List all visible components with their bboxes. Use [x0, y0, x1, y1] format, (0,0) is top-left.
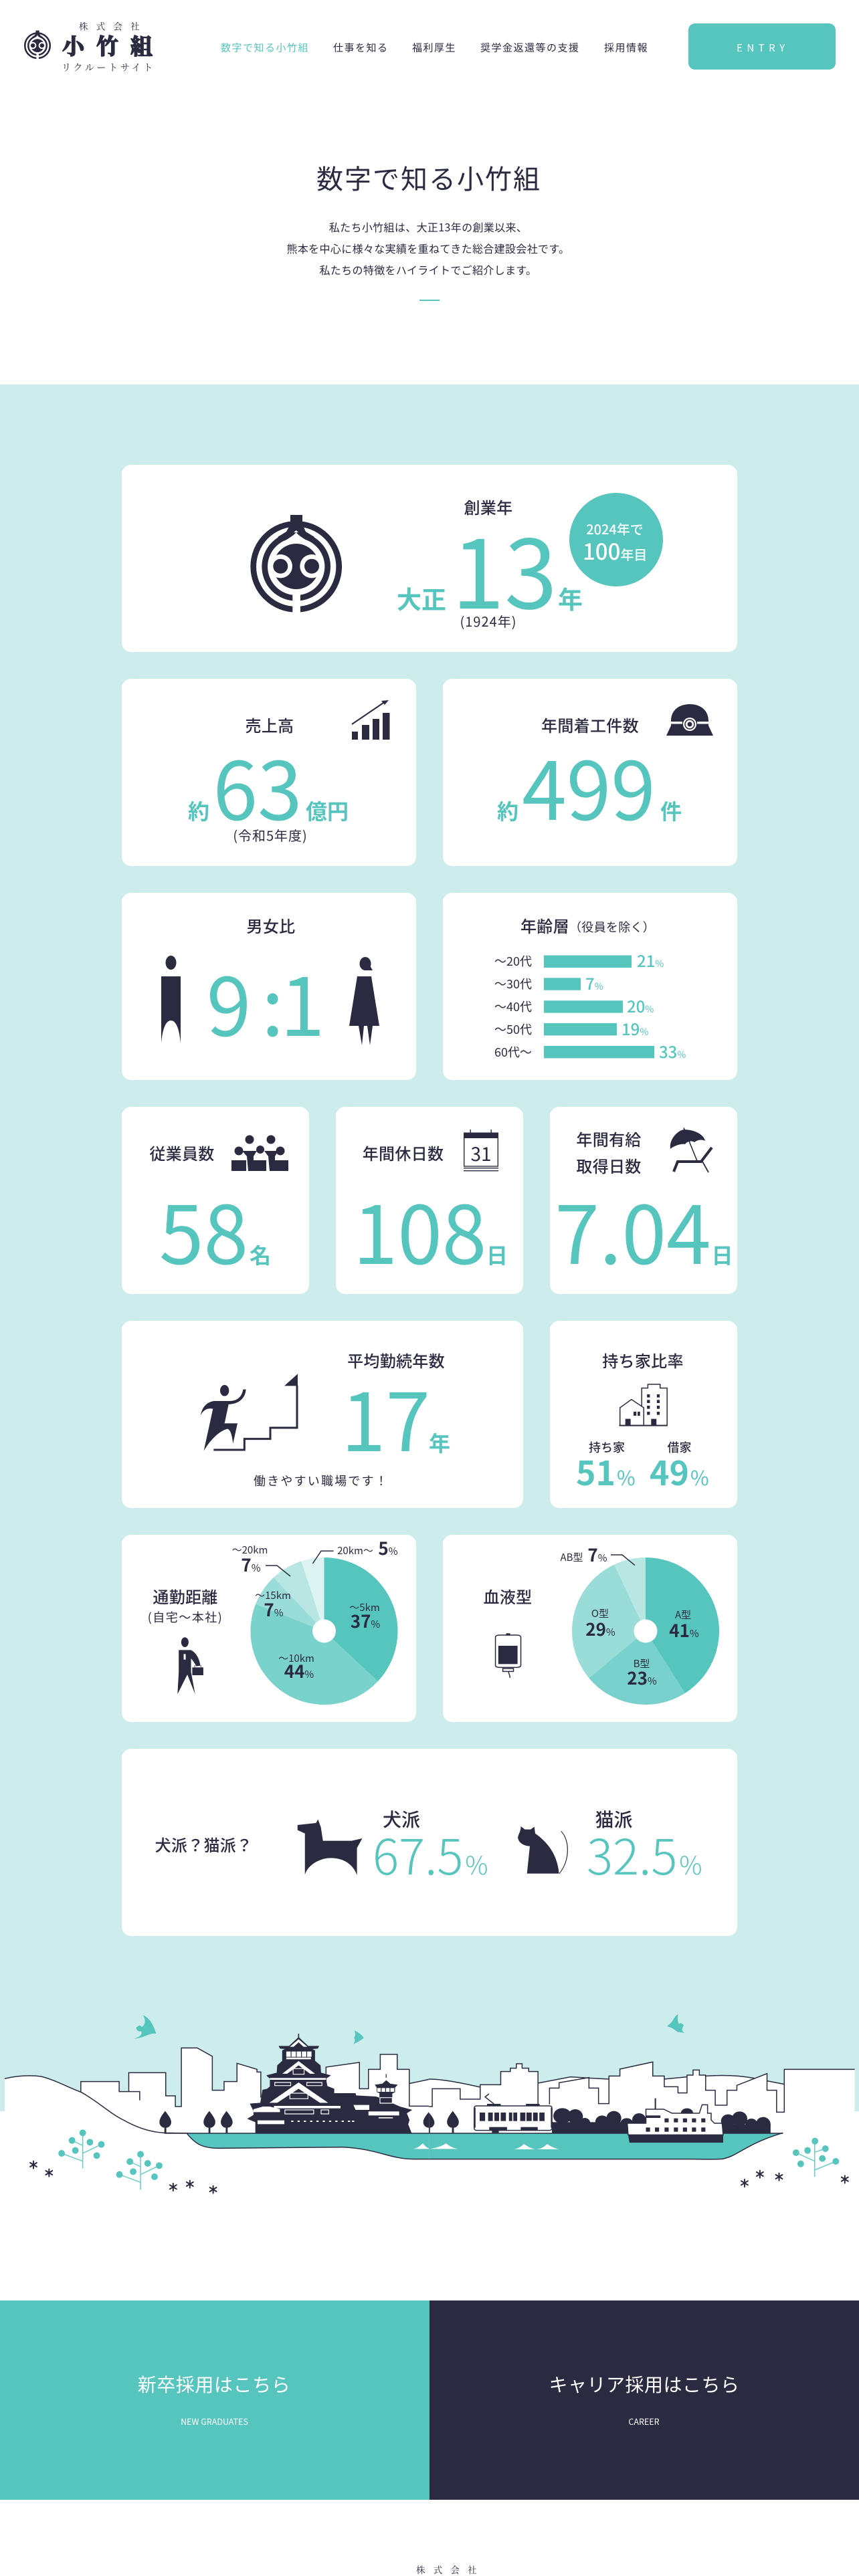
ratio value: 9 [207, 943, 251, 1059]
river [187, 2133, 430, 2159]
project value: 499 [522, 727, 656, 843]
pie labels: 7% [264, 1597, 284, 1622]
panel: annual holidays [336, 1107, 523, 1294]
panel: age distribution [443, 893, 737, 1080]
intro text: 私たち小竹組は、大正13年の創業以来、 [329, 219, 527, 235]
panel: gender ratio [122, 893, 416, 1080]
asterisk plants [741, 2171, 848, 2187]
navigation [221, 40, 648, 55]
illustration: Kumamoto cityscape [4, 2014, 855, 2194]
icon: blood bag [496, 1633, 521, 1678]
icon: company emblem [254, 515, 339, 614]
bar chart: 19% [622, 1016, 648, 1040]
heading: (自宅～本社) [148, 1608, 223, 1626]
heading [576, 1127, 642, 1177]
intro text: 私たちの特徴をハイライトでご紹介します。 [319, 261, 537, 278]
heading: 売上高 [246, 713, 294, 736]
bar chart: 33% [659, 1039, 686, 1063]
sales value: 63 [213, 727, 302, 843]
logo [25, 19, 165, 74]
ratio value: 1 [280, 943, 324, 1059]
tram [474, 2094, 552, 2133]
icon: woman [349, 957, 379, 1045]
bar chart: 21% [637, 948, 664, 972]
pie labels: 29% [585, 1616, 615, 1641]
heading: 平均勤続年数 [347, 1348, 445, 1372]
pie labels [561, 1542, 699, 1690]
pie labels: A型 [675, 1608, 691, 1622]
heading: 年間休日数 [363, 1141, 444, 1164]
navigation: 奨学金返還等の支援 [480, 40, 580, 55]
heading: 血液型 [484, 1584, 532, 1608]
heading: 持ち家比率 [602, 1348, 684, 1372]
founding value: 大正 [397, 580, 446, 616]
heading: 従業員数 [149, 1141, 215, 1164]
pie labels: 7% [587, 1542, 607, 1567]
employee value: 58 [159, 1171, 248, 1287]
logo emblem [25, 31, 50, 60]
founding value: 年 [558, 580, 583, 616]
waves [429, 2143, 560, 2149]
castle [247, 2034, 412, 2133]
bar chart: 7% [585, 971, 603, 994]
icon: calendar: 31 [470, 1140, 492, 1167]
employee value: 名 [250, 1239, 271, 1270]
pie labels: ～15km [255, 1588, 291, 1602]
entry button: ENTRY [737, 41, 789, 55]
heading: 年間有給 [576, 1127, 642, 1150]
panel: annual projects [443, 679, 737, 866]
logo: 小竹組 [62, 29, 165, 61]
accent dash [419, 300, 440, 301]
icon: man [161, 956, 181, 1043]
bar chart: ～20代 [494, 952, 532, 970]
navigation: 福利厚生 [412, 40, 456, 55]
rented share: 借家 [668, 1438, 692, 1456]
pie labels: 7% [241, 1552, 261, 1577]
logo: 株式会社 [79, 19, 148, 32]
project value: 件 [660, 795, 682, 826]
badge: 2024年で [586, 519, 644, 538]
river [429, 2133, 783, 2159]
sales value: 億円 [306, 795, 349, 826]
cat share: 猫派 [595, 1806, 633, 1832]
owned share: 51% [576, 1447, 636, 1495]
skyline outline [429, 2062, 855, 2112]
dog share: 67.5% [373, 1818, 488, 1889]
heading: 取得日数 [576, 1154, 642, 1177]
call to action: new graduates [0, 2300, 430, 2500]
call to action: career [430, 2300, 859, 2500]
navigation: 採用情報 [604, 40, 648, 55]
tree [447, 2111, 459, 2133]
badge: 100年目 [583, 534, 647, 566]
pie chart [572, 1555, 719, 1705]
cat share: 32.5% [587, 1818, 702, 1889]
ferry [628, 2099, 723, 2143]
entry button [688, 23, 836, 70]
rented share: 49% [650, 1447, 709, 1495]
owned share: 持ち家 [589, 1438, 625, 1456]
pie labels: B型 [634, 1656, 650, 1671]
founding value [397, 498, 583, 636]
sales value [188, 727, 349, 843]
icon: growth chart [352, 700, 389, 740]
career subtitle: CAREER [628, 2415, 660, 2428]
icon: cat [518, 1826, 567, 1874]
project value: 約 [497, 795, 518, 826]
heading [520, 914, 655, 937]
badge [569, 493, 663, 586]
footer company label: 株式会社 [416, 2563, 485, 2576]
holiday value: 108 [353, 1171, 486, 1287]
icon: beach umbrella and chair [670, 1128, 712, 1172]
intro text [286, 219, 570, 278]
dog share: 犬派 [383, 1806, 420, 1832]
icon: helmet [666, 704, 713, 736]
ratio value: : [262, 943, 284, 1059]
panel: paid leave [550, 1107, 737, 1294]
tenure value: 17 [341, 1358, 430, 1475]
icon: commuter [177, 1637, 203, 1694]
bar chart [494, 948, 686, 1063]
pie labels: 23% [627, 1665, 657, 1690]
heading: 犬派？猫派？ [155, 1832, 252, 1856]
panel: employees [122, 1107, 309, 1294]
note: (令和5年度) [233, 825, 308, 845]
caption: 働きやすい職場です！ [254, 1472, 389, 1489]
pie labels: 44% [284, 1658, 314, 1683]
heading: 年間着工件数 [541, 713, 639, 736]
intro [286, 158, 570, 301]
mint background section [0, 385, 859, 2111]
panel: dog or cat [122, 1749, 737, 1936]
intro text: 熊本を中心に様々な実績を重ねてきた総合建設会社です。 [286, 240, 570, 256]
sales value: 約 [188, 795, 209, 826]
founding value: 13 [452, 498, 557, 636]
heading: 年齢層 [520, 914, 569, 937]
teal tree [793, 2138, 839, 2177]
tenure value: 年 [429, 1427, 450, 1458]
header [24, 19, 836, 74]
bushes [552, 2108, 771, 2133]
new graduates subtitle: NEW GRADUATES [181, 2415, 248, 2428]
pie labels: ～5km [349, 1600, 380, 1614]
pie labels: ～10km [278, 1651, 314, 1665]
panel: sales [122, 679, 416, 866]
panel: blood type [443, 1535, 737, 1722]
icon: calendar [464, 1130, 498, 1171]
teal trees [58, 2129, 163, 2189]
wave [413, 2143, 430, 2149]
ratio value [207, 943, 324, 1059]
pie labels: O型 [591, 1606, 609, 1620]
icon: runner on stairs [201, 1374, 298, 1451]
pie labels [232, 1535, 398, 1683]
pie labels: ～20km [232, 1543, 268, 1557]
skyline fill [429, 2062, 855, 2225]
pie labels: 41% [669, 1618, 699, 1642]
logo: リクルートサイト [62, 61, 155, 74]
pie chart [250, 1551, 398, 1705]
leave value: 日 [711, 1239, 733, 1270]
bar chart: ～30代 [494, 975, 532, 992]
navigation: 数字で知る小竹組 [221, 40, 309, 55]
skyline outline [5, 2048, 430, 2133]
note: (1924年) [460, 611, 516, 631]
bird [667, 2014, 685, 2033]
leave value: 7.04 [555, 1171, 711, 1287]
heading: 通勤距離 [153, 1584, 218, 1608]
new graduates title: 新卒採用はこちら [138, 2371, 290, 2397]
heading: 創業年 [464, 495, 512, 518]
bar chart: 60代～ [494, 1043, 532, 1061]
title: 数字で知る小竹組 [316, 158, 541, 197]
panel: founding year [122, 465, 737, 652]
panel: commute distance [122, 1535, 416, 1722]
career title: キャリア採用はこちら [549, 2371, 740, 2397]
panel: home ownership [550, 1321, 737, 1508]
icon: people [231, 1136, 288, 1171]
bar chart: ～40代 [494, 998, 532, 1015]
asterisk plants [30, 2161, 217, 2193]
panel: average tenure [122, 1321, 523, 1508]
icon: dog [298, 1820, 363, 1875]
pie labels: 5% [378, 1535, 398, 1560]
heading: 男女比 [247, 914, 295, 937]
navigation: 仕事を知る [333, 40, 389, 55]
holiday value: 日 [486, 1239, 508, 1270]
icon: house and apartment [619, 1384, 668, 1426]
heading: （役員を除く） [569, 918, 655, 936]
pie labels: 20km～ [337, 1543, 373, 1558]
bar chart: ～50代 [494, 1021, 532, 1038]
skyline fill [5, 2048, 430, 2225]
birds [134, 2015, 364, 2044]
trees [159, 2111, 431, 2133]
right half of the town [429, 2014, 855, 2225]
pie labels: 37% [351, 1608, 380, 1633]
bar chart: 20% [627, 994, 654, 1017]
left half of the town [5, 2015, 431, 2225]
pie labels: AB型 [561, 1550, 583, 1564]
heading [148, 1584, 223, 1626]
